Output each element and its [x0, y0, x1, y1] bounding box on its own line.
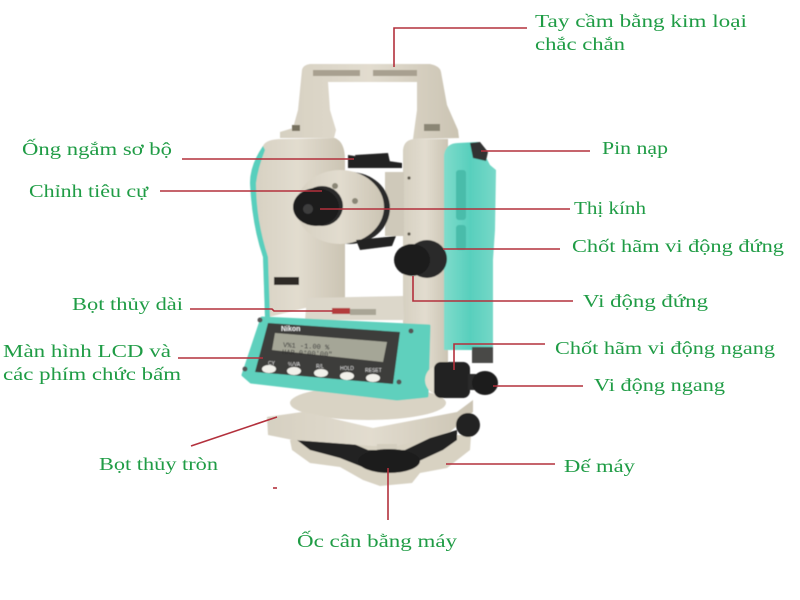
lower yoke with long bubble	[305, 296, 404, 320]
leader line: focus	[160, 190, 322, 192]
label: handle: chắc chắn	[535, 34, 625, 54]
black spinner ring	[293, 430, 457, 468]
battery cover	[444, 142, 496, 350]
keypad buttons	[262, 365, 380, 382]
label: battery: Pin nạp	[602, 138, 668, 158]
eyepiece	[293, 186, 343, 226]
leader line: horizontal clamp	[454, 344, 545, 370]
display panel: RESET	[365, 368, 382, 374]
panel screws	[242, 318, 414, 384]
brand: Nikon	[281, 326, 300, 333]
leader line: battery	[481, 150, 590, 152]
label: vertical clamp: Chốt hãm vi động đứng	[572, 236, 784, 256]
leader line: horizontal tangent	[493, 385, 583, 387]
tribrach plate	[267, 400, 473, 446]
label: levelling screw: Ốc cân bằng máy	[297, 530, 457, 551]
display panel	[242, 318, 429, 399]
label: handle: Tay cầm bằng kim loại	[535, 11, 747, 31]
label: long bubble: Bọt thủy dài	[72, 294, 183, 314]
leader line: sighting tube	[182, 158, 354, 160]
theodolite instrument	[242, 64, 498, 486]
left arm	[250, 138, 345, 318]
keypad labels: CY	[268, 361, 276, 367]
label: eyepiece: Thị kính	[574, 198, 646, 218]
display panel: HAR 0°00'00"	[282, 348, 333, 360]
leader line: base	[446, 463, 555, 465]
label: horizontal clamp: Chốt hãm vi động ngang	[555, 338, 775, 358]
base dome	[290, 386, 446, 420]
front levelling screw	[358, 449, 420, 473]
telescope	[296, 153, 404, 250]
label: horizontal tangent: Vi động ngang	[594, 375, 725, 395]
label: LCD and keys: các phím chức bấm	[3, 364, 181, 384]
leader line: vertical clamp	[443, 248, 560, 250]
leader line: handle	[394, 28, 527, 67]
leader line: circular bubble	[191, 417, 277, 446]
label: sighting tube: Ống ngắm sơ bộ	[22, 138, 172, 159]
display panel: HOLD	[340, 366, 354, 372]
label: handle	[535, 11, 747, 54]
label: LCD and keys: Màn hình LCD và	[3, 341, 171, 361]
levelling stem	[377, 444, 397, 456]
vertical clamp knob	[394, 240, 447, 278]
label: LCD and keys	[3, 341, 181, 384]
carrying handle	[280, 64, 459, 139]
leader line: LCD	[178, 357, 263, 359]
leader line: eyepiece	[320, 208, 570, 210]
leader line: vertical tangent	[413, 276, 573, 301]
leader line: levelling screw	[387, 468, 389, 520]
label: circular bubble: Bọt thủy tròn	[99, 454, 218, 474]
horizontal clamp and tangent knobs	[425, 347, 498, 398]
display panel: %/VA	[288, 362, 301, 368]
leader line: long bubble	[190, 309, 333, 311]
display panel: R/L	[316, 364, 324, 370]
right arm	[403, 139, 448, 372]
label: vertical tangent: Vi động đứng	[583, 291, 708, 311]
LCD readout: V%1 -1.00 %	[283, 342, 330, 352]
label: base: Đế máy	[564, 456, 635, 476]
side levelling screw	[456, 413, 480, 437]
base plate	[290, 430, 471, 486]
stray mark	[273, 487, 277, 489]
label: focus: Chỉnh tiêu cự	[29, 181, 150, 201]
